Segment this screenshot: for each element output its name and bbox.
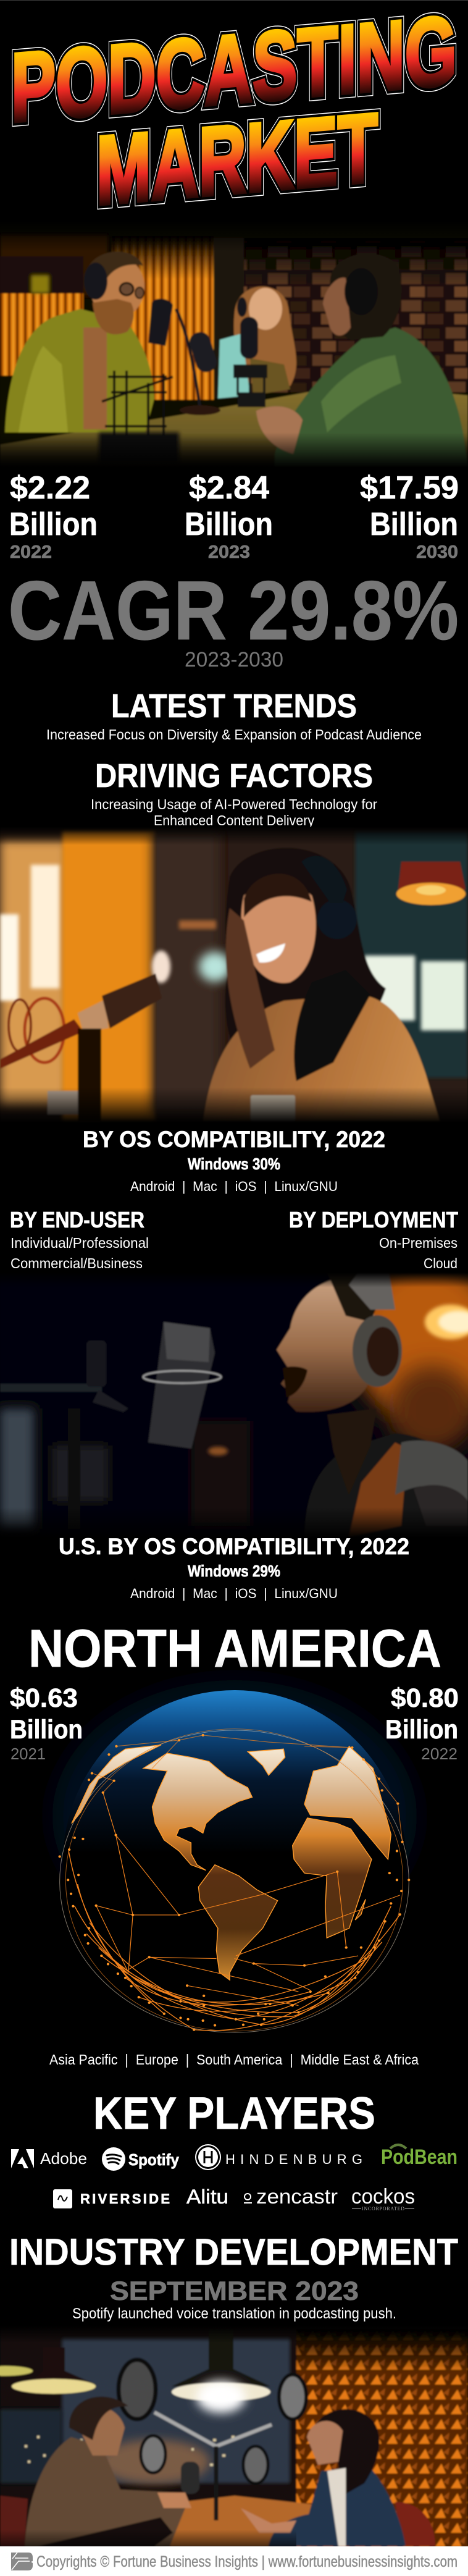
lamp — [396, 862, 466, 905]
overhead microphones and booms — [119, 2360, 306, 2520]
by end-user — [10, 1207, 149, 1271]
logo: Spotify — [102, 2147, 179, 2171]
regional stat 2021: 2021 — [10, 1745, 46, 1763]
stat 2022: Billion — [9, 507, 98, 542]
U.S. by OS compatibility 2022 — [59, 1534, 409, 1601]
regional stat 2021: $0.63 — [10, 1683, 78, 1713]
footer strip — [0, 2546, 468, 2576]
industry development — [9, 2231, 458, 2322]
man on the left — [5, 251, 154, 432]
table — [169, 2494, 312, 2546]
industry development: Spotify launched voice translation in podcasting push. — [72, 2305, 396, 2322]
latest trends — [46, 688, 422, 743]
man — [277, 1270, 468, 1537]
stat 2023 — [185, 470, 273, 562]
by deployment: Cloud — [424, 1255, 458, 1271]
logo: Alitu: Alitu — [186, 2186, 228, 2208]
by deployment — [289, 1207, 458, 1271]
man — [25, 2397, 191, 2546]
stat 2022: $2.22 — [10, 470, 90, 506]
regional stat 2022: Billion — [385, 1715, 458, 1745]
stat 2023: $2.84 — [189, 470, 269, 506]
stat 2023: Billion — [185, 507, 273, 542]
regional stat 2022 — [385, 1683, 459, 1763]
logo: Zencastr: zencastr — [256, 2185, 338, 2208]
logo: Adobe — [11, 2149, 87, 2168]
logo: Cockos: INCORPORATED — [362, 2206, 404, 2212]
by OS compatibility 2022: Android | Mac | iOS | Linux/GNU — [130, 1179, 338, 1194]
logo: Adobe: Adobe — [40, 2149, 87, 2168]
market size stats — [9, 470, 459, 562]
driving factors: DRIVING FACTORS — [95, 757, 373, 794]
photo: smiling woman with headphones at a microphone — [0, 827, 468, 1123]
photo: cyborg man singing at a studio microphone — [0, 1260, 468, 1538]
by end-user: Commercial/Business — [10, 1255, 143, 1271]
title line: MARKET — [96, 93, 378, 225]
studio microphone — [0, 974, 162, 1121]
logo: Fortune Business Insights — [11, 2553, 33, 2570]
woman — [203, 848, 440, 1121]
stat 2030 — [360, 470, 459, 562]
red chairs — [395, 2502, 435, 2546]
stat 2030: $17.59 — [360, 470, 459, 506]
regional stat 2021 — [10, 1683, 83, 1763]
key player logos — [11, 2145, 458, 2212]
photo: three people recording a podcast in a studio — [0, 221, 468, 468]
logo: Riverside: RIVERSIDE — [80, 2191, 170, 2207]
driving factors — [91, 757, 377, 828]
by OS compatibility 2022 — [83, 1127, 385, 1194]
woman — [241, 2409, 406, 2546]
stat 2022: 2022 — [10, 542, 52, 562]
stat 2022 — [9, 470, 98, 562]
U.S. by OS compatibility 2022: U.S. BY OS COMPATIBILITY, 2022 — [59, 1534, 409, 1559]
photo: man and woman talking across a podcast table — [0, 2326, 468, 2547]
U.S. by OS compatibility 2022: Windows 29% — [188, 1562, 280, 1580]
driving factors: Increasing Usage of AI-Powered Technology for — [91, 796, 377, 812]
driving factors: Enhanced Content Delivery — [154, 812, 314, 828]
latest trends: Increased Focus on Diversity & Expansion of Podcast Audience — [46, 726, 422, 743]
regional stat 2021: Billion — [10, 1715, 83, 1745]
stat 2023: 2023 — [208, 542, 250, 562]
title: Podcasting Market — [11, 0, 457, 225]
logo: Riverside — [53, 2189, 170, 2208]
CAGR callout: 2023-2030 — [185, 648, 283, 671]
table — [0, 390, 468, 460]
heading: key players: KEY PLAYERS — [93, 2089, 375, 2139]
stat 2030: 2030 — [416, 542, 458, 562]
man on the right — [256, 253, 468, 468]
continents — [72, 1745, 391, 1980]
U.S. by OS compatibility 2022: Android | Mac | iOS | Linux/GNU — [130, 1586, 338, 1601]
by deployment: On-Premises — [379, 1235, 458, 1251]
by end-user: Individual/Professional — [10, 1235, 149, 1251]
other regions list: Asia Pacific | Europe | South America | Middle East & Africa — [49, 2052, 419, 2068]
regional stat 2022: 2022 — [421, 1745, 458, 1763]
latest trends: LATEST TRENDS — [111, 688, 357, 725]
microphones and stands — [99, 299, 267, 463]
network dots — [60, 1735, 409, 2030]
globe with network lines — [52, 1680, 417, 2034]
by end-user: BY END-USER — [10, 1207, 144, 1232]
stat 2030: Billion — [370, 507, 458, 542]
logo: Hindenburg: HINDENBURG — [225, 2152, 362, 2167]
woman in the middle — [218, 287, 296, 398]
regional stat 2022: $0.80 — [391, 1683, 459, 1713]
logo: Cockos: cockos — [351, 2185, 415, 2208]
pendant lamps — [0, 2329, 270, 2413]
network lines — [69, 1735, 403, 2031]
regional heading: North America: NORTH AMERICA — [28, 1619, 441, 1678]
logo: Spotify: Spotify — [128, 2150, 179, 2169]
by OS compatibility 2022: Windows 30% — [188, 1155, 280, 1173]
by OS compatibility 2022: BY OS COMPATIBILITY, 2022 — [83, 1127, 385, 1152]
condenser microphone on a boom — [0, 1322, 221, 1529]
logo: Hindenburg — [196, 2145, 362, 2170]
industry development: SEPTEMBER 2023 — [110, 2276, 359, 2306]
